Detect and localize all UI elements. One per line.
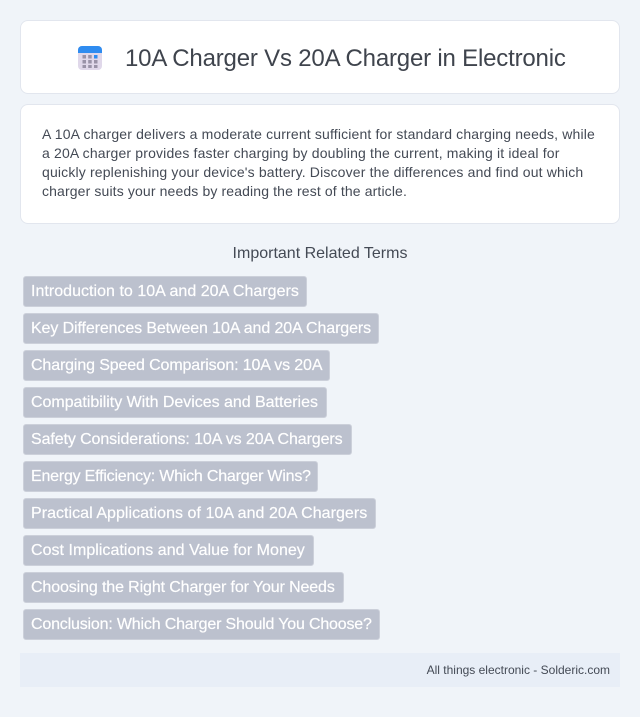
term 7 — [23, 498, 376, 529]
term 4: Compatibility With Devices and Batteries — [31, 394, 318, 411]
footer bar — [20, 653, 620, 687]
icon: calendar — [78, 46, 102, 70]
term 8: Cost Implications and Value for Money — [31, 542, 305, 559]
related terms heading: Important Related Terms — [233, 245, 407, 262]
intro paragraph: a 20A charger provides faster charging by doubling the current, making it ideal for — [42, 145, 560, 161]
term 5: Safety Considerations: 10A vs 20A Chargers — [31, 431, 343, 448]
term 1: Introduction to 10A and 20A Chargers — [31, 283, 299, 300]
related terms list — [23, 276, 380, 640]
term 2: Key Differences Between 10A and 20A Chargers — [31, 320, 371, 337]
term 3 — [23, 350, 330, 381]
intro paragraph — [42, 126, 595, 199]
term 6 — [23, 461, 318, 492]
term 2 — [23, 313, 379, 344]
intro paragraph: charger suits your needs by reading the rest of the article. — [42, 183, 407, 199]
intro paragraph: quickly replenishing your device's battery. Discover the differences and find out which — [42, 164, 583, 180]
term 5 — [23, 424, 352, 455]
term 8 — [23, 535, 314, 566]
intro text panel — [20, 104, 620, 224]
term 9 — [23, 572, 344, 603]
term 10 — [23, 609, 380, 640]
header panel — [20, 20, 620, 94]
term 4 — [23, 387, 327, 418]
term 3: Charging Speed Comparison: 10A vs 20A — [31, 357, 322, 374]
footer credit: All things electronic - Solderic.com — [427, 663, 610, 677]
term 6: Energy Efficiency: Which Charger Wins? — [31, 468, 311, 485]
term 7: Practical Applications of 10A and 20A Chargers — [31, 505, 367, 522]
term 10: Conclusion: Which Charger Should You Choose? — [31, 616, 372, 633]
intro paragraph: A 10A charger delivers a moderate current sufficient for standard charging needs, while — [42, 126, 595, 142]
title: 10A Charger Vs 20A Charger in Electronic — [125, 45, 566, 72]
term 9: Choosing the Right Charger for Your Needs — [31, 579, 335, 596]
term 1 — [23, 276, 307, 307]
